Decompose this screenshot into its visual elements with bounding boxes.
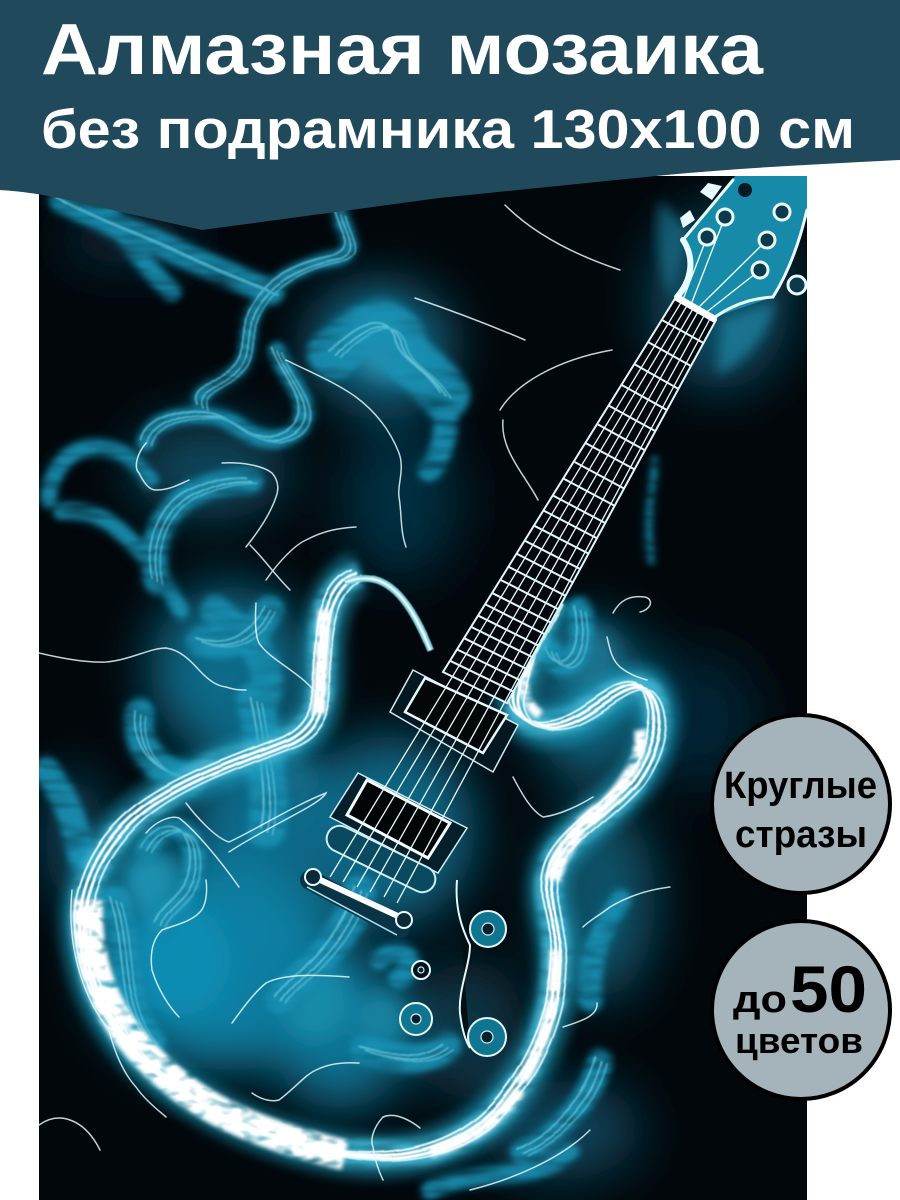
strings [330,301,711,903]
badge: up to 50 colours: до [733,979,787,1021]
header banner [0,0,900,230]
guitar headstock [657,176,807,375]
neck pickup [390,670,518,772]
subtitle: без подрамника 130х100 см [41,98,855,160]
badge: round rhinestones: стразы [735,814,867,856]
badge: round rhinestones: Круглые [724,765,877,807]
badge: up to 50 colours: 50 [790,952,867,1026]
thin white lines [39,205,670,1190]
painting: blue flame guitar [39,176,807,1200]
neck and frets [443,297,716,703]
blue smoke glows [45,210,790,1180]
title: Алмазная мозаика [41,10,764,90]
teal brush strokes [46,195,655,1190]
badge: up to 50 colours [712,921,890,1099]
bridge and tailpiece [305,821,440,935]
badge: up to 50 colours: цветов [735,1020,863,1061]
smoke highlights [120,300,618,1048]
knobs and f-holes [400,880,506,1056]
bridge pickup [330,773,467,873]
badge: round rhinestones [712,715,890,893]
guitar body flame outline [74,569,665,1160]
